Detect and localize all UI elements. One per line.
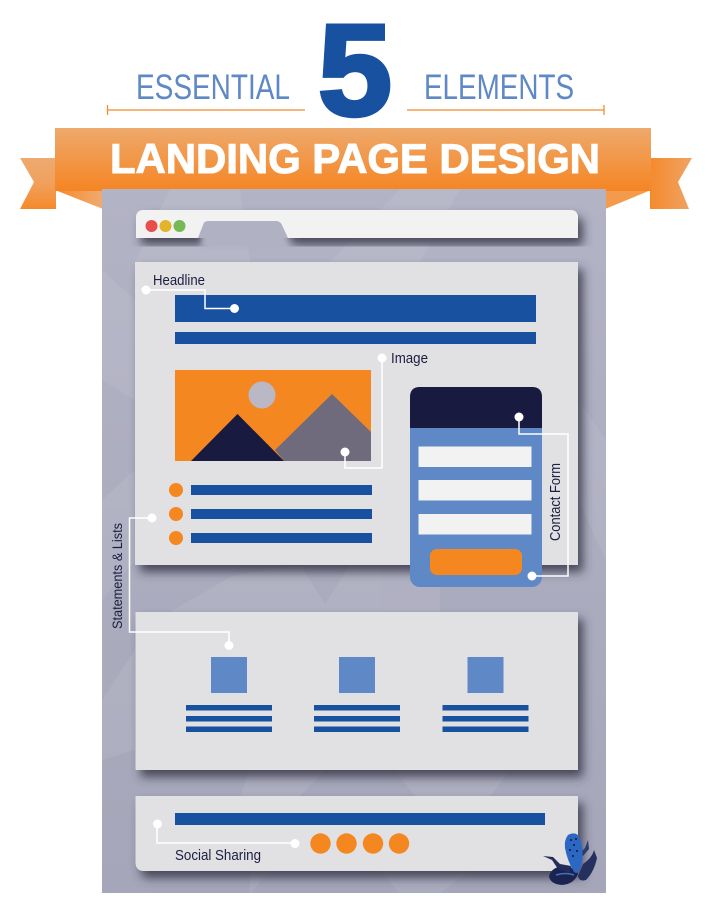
ribbon fold: right <box>605 190 651 209</box>
callout: statements and lists <box>109 514 234 650</box>
callout: image: Image <box>391 351 428 367</box>
ribbon body <box>55 128 651 191</box>
banner title text: LANDING PAGE DESIGN <box>110 135 600 182</box>
headline bar <box>175 295 536 322</box>
rule: right <box>407 105 604 115</box>
browser bar <box>136 210 578 248</box>
browser chrome shadow <box>136 210 578 238</box>
browser chrome with tab <box>136 210 578 238</box>
ribbon tail: left <box>20 158 56 209</box>
subheadline bar <box>175 332 536 344</box>
window button: red <box>146 220 158 232</box>
ribbon banner <box>20 128 692 209</box>
social icons <box>310 833 409 854</box>
submit button <box>430 549 522 575</box>
panel background <box>136 796 578 871</box>
ribbon fold: left <box>55 190 103 209</box>
title: 5 essential elements <box>108 0 604 143</box>
callout: headline: Headline <box>153 273 205 289</box>
window button: green <box>174 220 186 232</box>
panel: features section <box>136 612 578 770</box>
form field 3 <box>418 514 532 534</box>
panel background <box>136 612 578 770</box>
browser tab notch <box>198 221 288 238</box>
callout: social sharing <box>153 820 300 864</box>
feature column 2 <box>314 657 400 732</box>
ribbon tail: right <box>650 158 692 209</box>
rule: left <box>108 105 305 115</box>
callout: social sharing: Social Sharing <box>175 848 261 864</box>
heading: elements: ELEMENTS <box>424 68 574 107</box>
window button: yellow <box>160 220 172 232</box>
icon: blue poison dart frog <box>543 833 597 885</box>
callout: statements and lists: Statements & Lists <box>109 523 125 629</box>
heading: essential: ESSENTIAL <box>136 68 290 107</box>
callout: headline <box>142 273 239 313</box>
heading: number 5: 5 <box>318 0 392 143</box>
feature column 3 <box>442 657 528 732</box>
browser tab shadow fade <box>202 232 284 248</box>
form body <box>410 387 542 587</box>
callout: image <box>340 351 428 468</box>
panel background <box>135 262 578 565</box>
panel: footer social section <box>136 796 578 871</box>
form field 1 <box>418 446 532 467</box>
footer bar <box>175 813 545 825</box>
callout: contact form: Contact Form <box>548 463 564 541</box>
image placeholder <box>175 370 371 461</box>
feature column 1 <box>186 657 272 732</box>
bullet list <box>169 483 372 545</box>
contact form <box>410 387 542 587</box>
page background panel <box>102 189 606 893</box>
callout: contact form <box>514 412 568 580</box>
form header <box>410 387 542 428</box>
panel: main hero section <box>135 262 578 565</box>
form field 2 <box>418 480 532 500</box>
